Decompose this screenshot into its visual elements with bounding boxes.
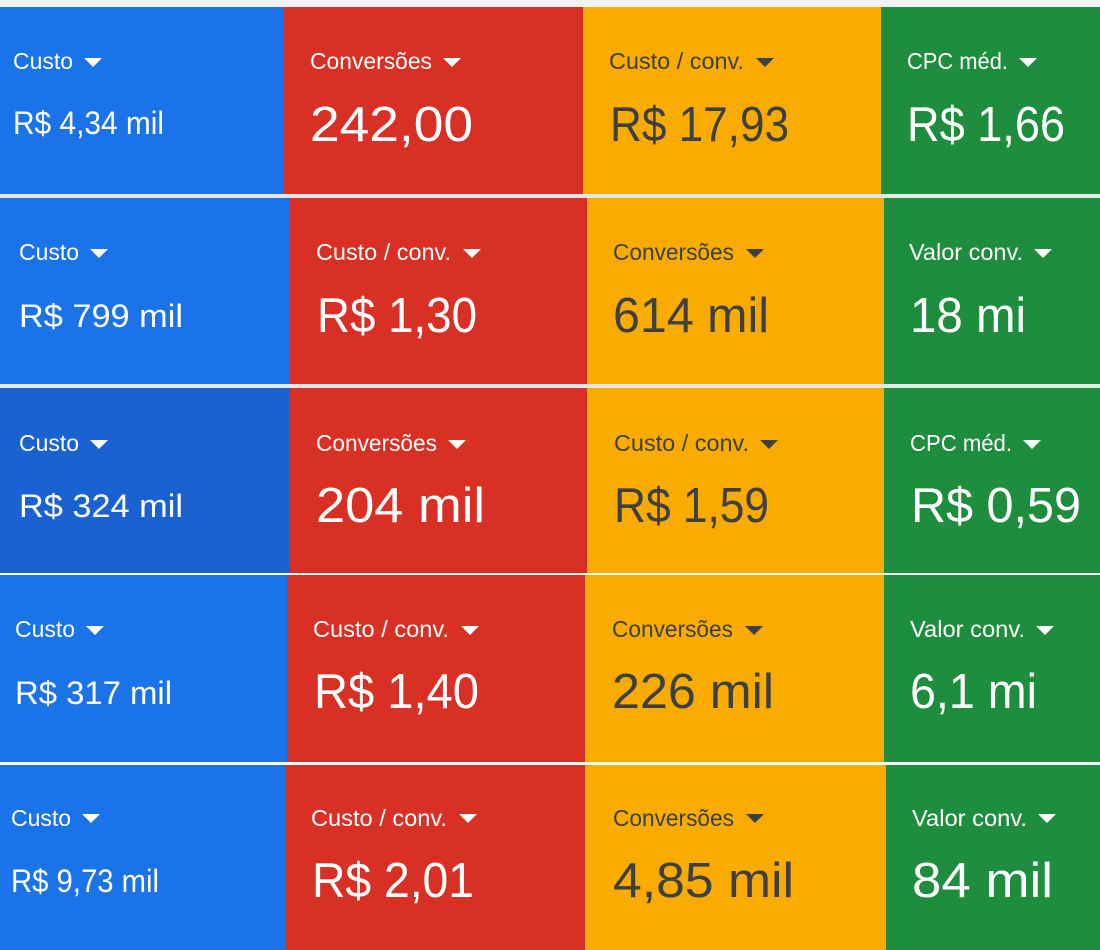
card: Conversões <box>587 198 884 384</box>
card: CPC méd.: CPC méd. <box>907 48 1008 74</box>
card: Conversões: 242,00 <box>310 98 473 152</box>
card: Valor conv.: Valor conv. <box>912 805 1027 831</box>
card: Conversões: Conversões <box>612 616 733 642</box>
card: Custo: Custo <box>15 616 75 642</box>
row 3 <box>0 388 1100 573</box>
card: Custo / conv.: Custo / conv. <box>311 805 447 831</box>
card: Custo / conv. <box>587 388 884 573</box>
card: Custo / conv. <box>583 7 881 194</box>
card: Conversões <box>290 388 587 573</box>
card: Conversões <box>585 765 886 950</box>
card: Custo / conv. <box>287 575 585 762</box>
card: Conversões: 4,85 mil <box>613 854 794 908</box>
card: Custo: Custo <box>13 48 73 74</box>
card: Valor conv.: Valor conv. <box>910 616 1025 642</box>
card: Valor conv. <box>884 575 1100 762</box>
card: Valor conv.: 84 mil <box>912 854 1053 908</box>
card: Custo / conv.: R$ 2,01 <box>312 854 474 908</box>
card: Conversões <box>585 575 884 762</box>
card: Conversões: Conversões <box>613 805 734 831</box>
row 5 <box>0 765 1100 950</box>
card: Custo / conv.: R$ 1,30 <box>317 289 477 343</box>
card: Conversões <box>284 7 583 194</box>
card: Custo <box>0 198 290 384</box>
card: Custo: R$ 799 mil <box>19 298 183 334</box>
card: Conversões: Conversões <box>613 239 734 265</box>
card: Valor conv. <box>884 198 1100 384</box>
card: Custo / conv.: Custo / conv. <box>614 430 749 456</box>
card: Custo / conv. <box>285 765 585 950</box>
card: Conversões: 614 mil <box>613 289 769 343</box>
card: Valor conv.: 18 mi <box>910 289 1026 343</box>
card: Custo: Custo <box>11 805 71 831</box>
card: Custo / conv. <box>290 198 587 384</box>
card: CPC méd.: R$ 1,66 <box>907 98 1065 152</box>
row 4 <box>0 575 1100 762</box>
card: Valor conv.: Valor conv. <box>909 239 1023 265</box>
card: Custo / conv.: R$ 17,93 <box>610 98 789 152</box>
card: Custo <box>0 388 290 573</box>
card: Custo / conv.: Custo / conv. <box>313 616 449 642</box>
card: Custo <box>0 575 287 762</box>
card: Conversões: Conversões <box>316 430 437 456</box>
card: Custo / conv.: R$ 1,40 <box>314 665 479 719</box>
card: Conversões: Conversões <box>310 48 432 74</box>
card: CPC méd.: R$ 0,59 <box>911 479 1081 533</box>
card: Custo: R$ 324 mil <box>19 488 183 524</box>
row 2 <box>0 198 1100 384</box>
row 1 <box>0 7 1100 194</box>
card: Valor conv. <box>886 765 1100 950</box>
card: Conversões: 204 mil <box>316 479 485 533</box>
card: Custo / conv.: Custo / conv. <box>316 239 451 265</box>
card: Custo: Custo <box>19 239 79 265</box>
card: Custo: R$ 4,34 mil <box>13 105 164 141</box>
card: CPC méd. <box>884 388 1100 573</box>
card: CPC méd.: CPC méd. <box>910 430 1012 456</box>
card: Conversões: 226 mil <box>612 665 774 719</box>
card: Custo / conv.: R$ 1,59 <box>614 479 769 533</box>
card: Custo: R$ 9,73 mil <box>11 863 159 899</box>
card: CPC méd. <box>881 7 1100 194</box>
card: Valor conv.: 6,1 mi <box>910 665 1037 719</box>
card: Custo: Custo <box>19 430 79 456</box>
card: Custo <box>0 765 285 950</box>
card: Custo / conv.: Custo / conv. <box>609 48 744 74</box>
card: Custo: R$ 317 mil <box>15 675 172 711</box>
card: Custo <box>0 7 284 194</box>
